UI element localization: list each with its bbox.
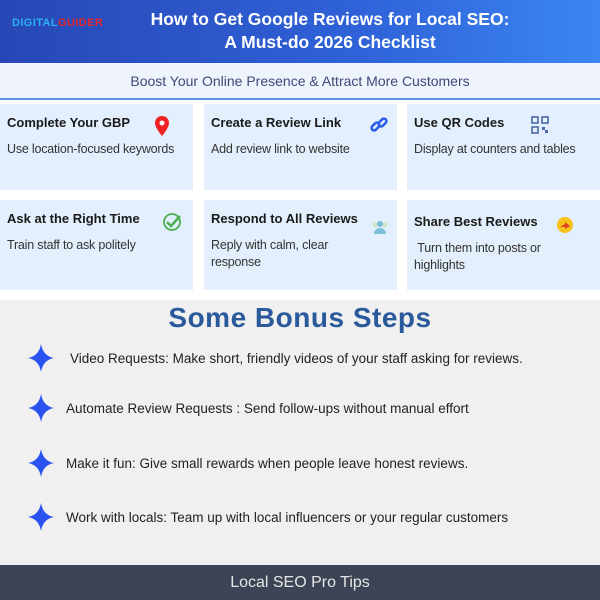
card: Share Best Reviews: Share Best Reviews	[414, 214, 538, 229]
card: Complete Your GBP: Use location-focused keywords	[7, 142, 174, 156]
title	[151, 9, 509, 52]
bonus title: Some Bonus Steps	[168, 302, 432, 333]
card: Complete Your GBP	[0, 104, 193, 190]
bonus item 1	[28, 344, 523, 372]
card: Share Best Reviews: Turn them into posts or	[417, 241, 541, 255]
bonus section	[0, 300, 600, 565]
icon: people	[372, 221, 388, 234]
card: Respond to All Reviews	[204, 200, 397, 290]
footer	[0, 565, 600, 600]
subtitle bar: Boost Your Online Presence & Attract More Customers	[130, 73, 470, 89]
card: Create a Review Link: Create a Review Link	[211, 115, 341, 130]
bonus item 4	[28, 503, 508, 531]
footer: Local SEO Pro Tips	[230, 574, 370, 591]
subtitle bar	[0, 63, 600, 100]
card: Respond to All Reviews: response	[211, 255, 261, 269]
card: Share Best Reviews: highlights	[414, 258, 465, 272]
bonus item 2	[28, 394, 469, 422]
card: Ask at the Right Time: Ask at the Right Time	[7, 211, 140, 226]
bonus item 3	[28, 449, 468, 477]
title: How to Get Google Reviews for Local SEO:	[151, 9, 509, 29]
card: Ask at the Right Time: Train staff to ask politely	[7, 238, 136, 252]
title: A Must-do 2026 Checklist	[224, 32, 436, 52]
bonus item 4: Work with locals: Team up with local influencers or your regular customers	[66, 510, 508, 524]
card: Respond to All Reviews: Reply with calm, clear	[211, 238, 328, 252]
bonus item 3: Make it fun: Give small rewards when people leave honest reviews.	[66, 456, 468, 470]
icon: share	[557, 217, 573, 233]
card: Create a Review Link: Add review link to website	[211, 142, 350, 156]
icon: qr	[531, 116, 549, 134]
card: Ask at the Right Time	[0, 200, 193, 290]
bonus item 1: Video Requests: Make short, friendly videos of your staff asking for reviews.	[70, 350, 523, 366]
card: Complete Your GBP: Complete Your GBP	[7, 115, 130, 130]
card: Use QR Codes: Display at counters and tables	[414, 142, 575, 156]
card: Create a Review Link	[204, 104, 397, 190]
card: Respond to All Reviews: Respond to All Reviews	[211, 211, 358, 226]
logo: DIGITALGUIDER	[12, 17, 103, 29]
bonus item 2: Automate Review Requests : Send follow-ups without manual effort	[66, 400, 469, 416]
icon: pin	[155, 116, 169, 136]
header banner	[0, 0, 600, 63]
card: Use QR Codes: Use QR Codes	[414, 115, 504, 130]
icon: link	[370, 117, 388, 132]
card: Share Best Reviews	[407, 200, 600, 290]
icon: check	[163, 213, 181, 231]
card: Use QR Codes	[407, 104, 600, 190]
